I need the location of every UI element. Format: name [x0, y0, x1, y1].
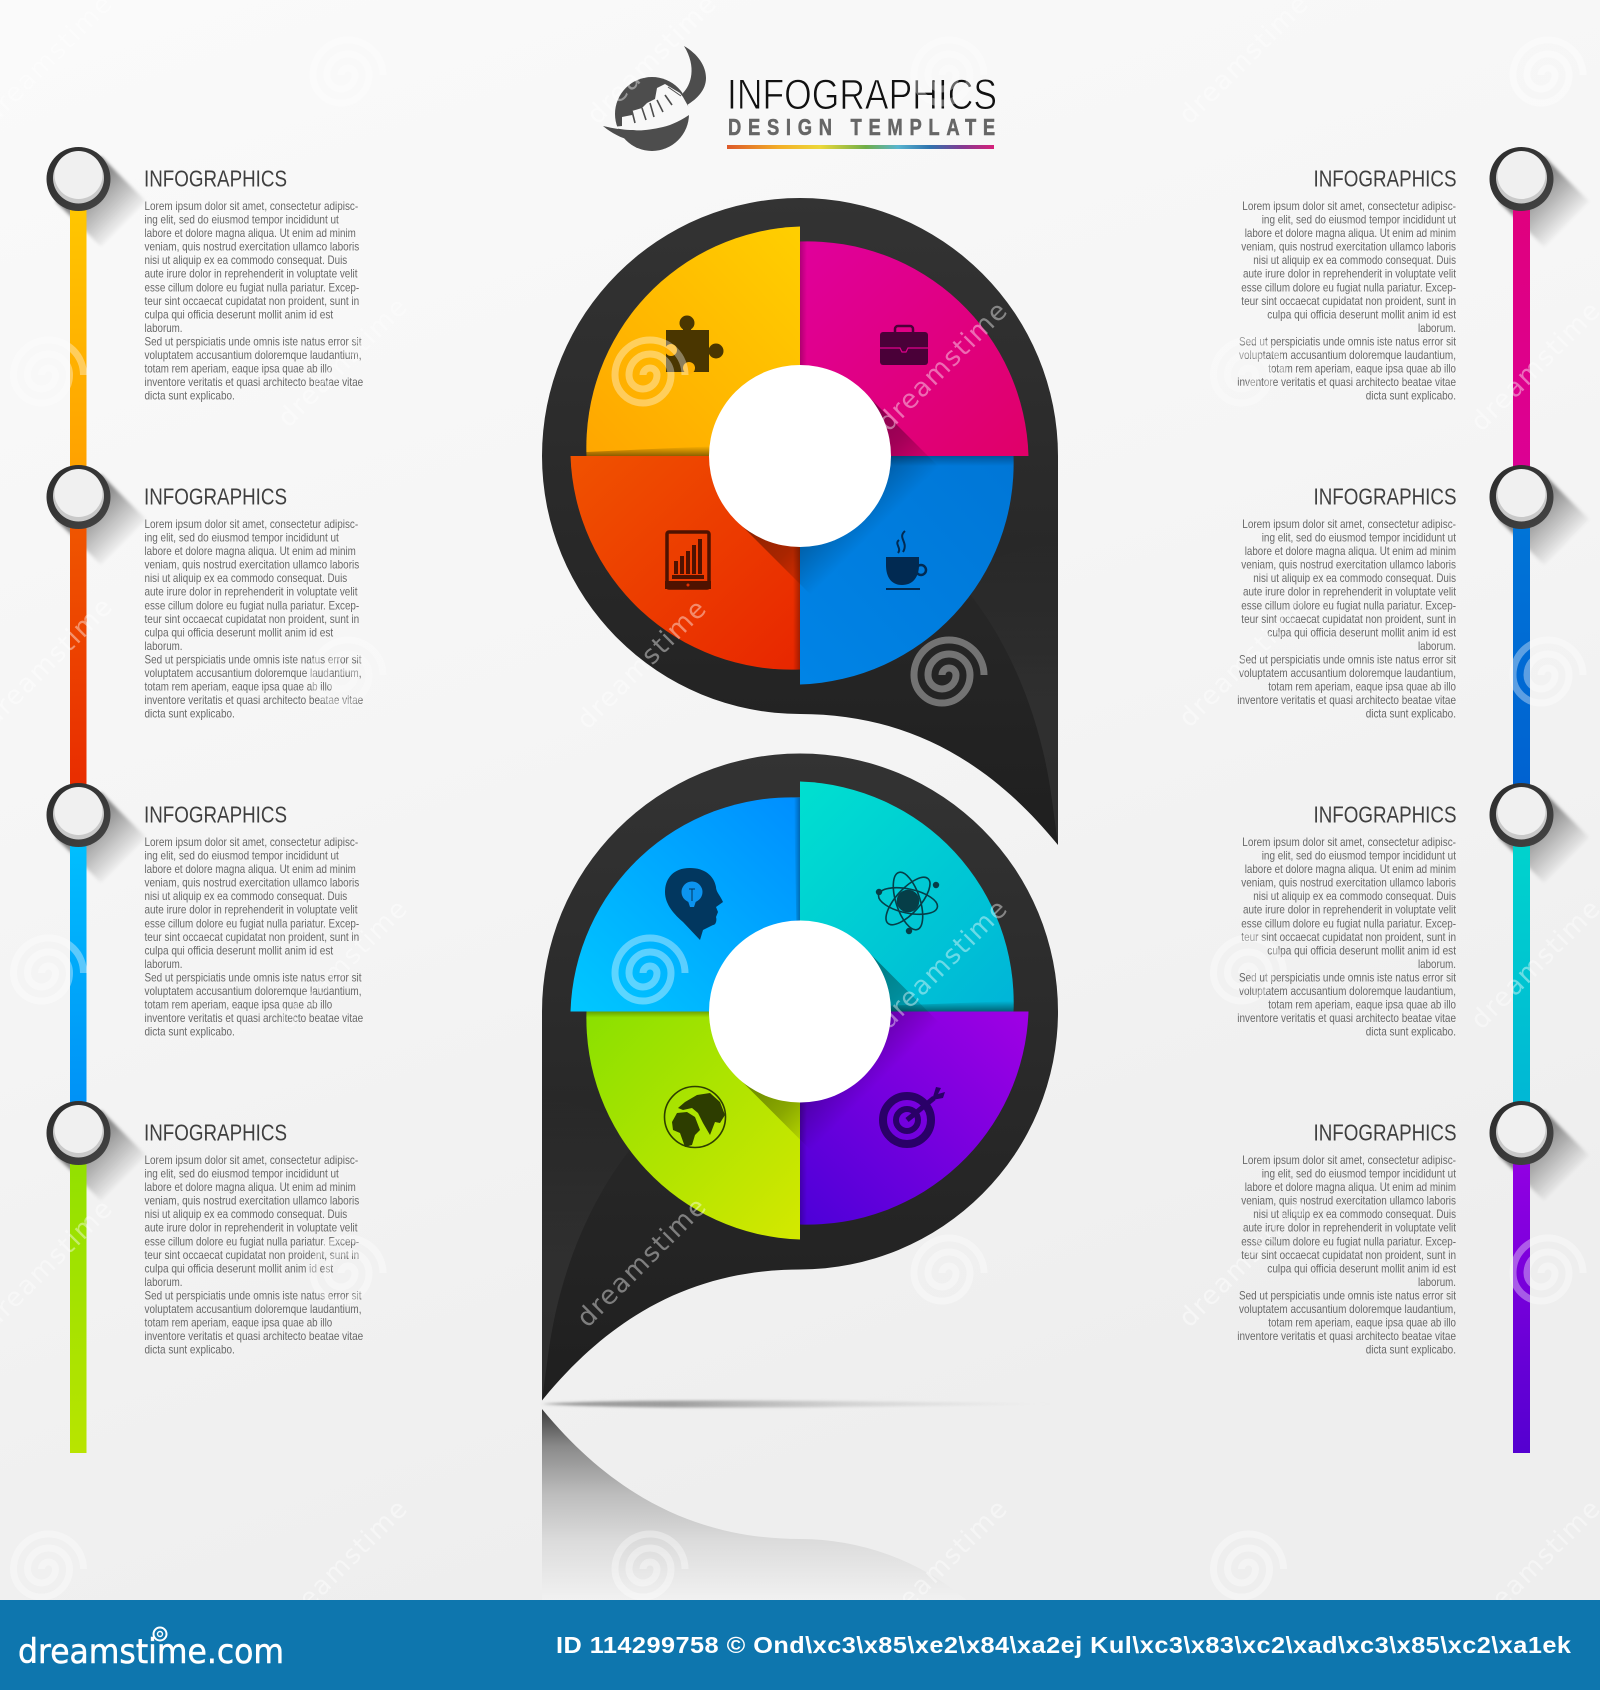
watermark text: dreamstime: [872, 295, 1014, 437]
text block: right 2: Lorem ipsum dolor sit amet, consectetur adipisc-: [1242, 517, 1456, 531]
text block: right 2: INFOGRAPHICS: [1314, 484, 1456, 510]
text block: left 2: laborum.: [144, 639, 182, 653]
text block: right 3: esse cillum dolore eu fugiat nulla pariatur. Excep-: [1241, 916, 1456, 930]
text block: left 1: nisi ut aliquip ex ea commodo consequat. Duis: [144, 253, 347, 267]
text block: left 1: INFOGRAPHICS: [144, 166, 287, 192]
text block: left 4: aute irure dolor in reprehenderit in voluptate velit: [144, 1221, 358, 1235]
bar: teal: [1513, 815, 1530, 1133]
watermark text: dreamstime: [571, 593, 713, 735]
bar: green: [70, 1133, 86, 1453]
footer credit: ID 114299758 © Ond\xc3\x85\xe2\x84\xa2ej Kul\xc3\x83\xc2\xad\xc3\x85\xc2\xa1ek: [556, 1633, 1572, 1659]
text block: right 4: INFOGRAPHICS: [1314, 1120, 1456, 1146]
icon: logo emblem: [603, 46, 706, 151]
text block: right 2: aute irure dolor in reprehenderit in voluptate velit: [1243, 585, 1457, 599]
text block: left 4: totam rem aperiam, eaque ipsa quae ab illo: [144, 1316, 332, 1330]
text block: left 3: teur sint occaecat cupidatat non proident, sunt in: [144, 930, 359, 944]
text block: right 1: inventore veritatis et quasi architecto beatae vitae: [1237, 375, 1456, 389]
text block: right 4: voluptatem accusantium doloremque laudantium,: [1239, 1302, 1456, 1316]
text block: left 3: [144, 802, 363, 1039]
text block: right 2: [1237, 484, 1457, 721]
text block: left 4: [144, 1120, 363, 1357]
node 4: [1490, 1101, 1554, 1165]
text block: right 1: aute irure dolor in reprehenderit in voluptate velit: [1243, 267, 1457, 281]
text block: left 2: voluptatem accusantium doloremque laudantium,: [144, 666, 362, 680]
text block: left 3: Sed ut perspiciatis unde omnis iste natus error sit: [144, 970, 362, 984]
text block: right 4: laborum.: [1418, 1275, 1456, 1289]
segment: magenta: [800, 241, 1028, 456]
segment: sky blue: [570, 797, 800, 1012]
text block: left 1: aute irure dolor in reprehenderit in voluptate velit: [144, 267, 358, 281]
text block: left 2: teur sint occaecat cupidatat non proident, sunt in: [144, 612, 359, 626]
ground shadow: [542, 1400, 1060, 1408]
text block: right 4: nisi ut aliquip ex ea commodo consequat. Duis: [1253, 1207, 1456, 1221]
text block: right 4: teur sint occaecat cupidatat non proident, sunt in: [1241, 1248, 1456, 1262]
text block: right 3: aute irure dolor in reprehenderit in voluptate velit: [1243, 903, 1457, 917]
text block: right 4: labore et dolore magna aliqua. Ut enim ad minim: [1245, 1180, 1456, 1194]
text block: left 1: Lorem ipsum dolor sit amet, consectetur adipisc-: [144, 199, 358, 213]
node 1: [46, 147, 110, 211]
center disc: [709, 365, 891, 547]
text block: left 3: Lorem ipsum dolor sit amet, consectetur adipisc-: [144, 835, 358, 849]
text block: right 2: culpa qui officia deserunt mollit anim id est: [1267, 625, 1457, 639]
bottom wheel: [570, 782, 1028, 1240]
text block: left 3: totam rem aperiam, eaque ipsa quae ab illo: [144, 998, 332, 1012]
text block: left 2: [144, 484, 363, 721]
text block: right 4: dicta sunt explicabo.: [1366, 1343, 1456, 1357]
segment: purple: [800, 1012, 1028, 1225]
text block: left 1: culpa qui officia deserunt mollit anim id est: [144, 307, 334, 321]
segment shadows: [586, 240, 1030, 686]
text block: left 3: voluptatem accusantium doloremque laudantium,: [144, 984, 362, 998]
right timeline: [1490, 147, 1589, 1453]
text block: left 3: esse cillum dolore eu fugiat nulla pariatur. Excep-: [144, 916, 359, 930]
text block: left 2: inventore veritatis et quasi architecto beatae vitae: [144, 693, 363, 707]
rainbow underline: [727, 145, 994, 149]
text block: right 3: labore et dolore magna aliqua. Ut enim ad minim: [1245, 862, 1456, 876]
text block: right 2: voluptatem accusantium doloremque laudantium,: [1239, 666, 1456, 680]
text block: left 3: laborum.: [144, 957, 182, 971]
bottom pin: dark speech-drop shape: [542, 754, 1058, 1400]
text block: right 1: culpa qui officia deserunt mollit anim id est: [1267, 307, 1457, 321]
text block: left 4: laborum.: [144, 1275, 182, 1289]
subheading: DESIGN TEMPLATE: DESIGN TEMPLATE: [728, 115, 995, 141]
text block: right 4: aute irure dolor in reprehenderit in voluptate velit: [1243, 1221, 1457, 1235]
text block: left 4: ing elit, sed do eiusmod tempor incididunt ut: [144, 1166, 339, 1180]
text block: right 2: totam rem aperiam, eaque ipsa quae ab illo: [1268, 680, 1456, 694]
segment: yellow: [586, 226, 800, 456]
text block: left 1: [144, 166, 363, 403]
text block: left 1: veniam, quis nostrud exercitation ullamco laboris: [144, 240, 359, 254]
text block: left 2: aute irure dolor in reprehenderit in voluptate velit: [144, 585, 358, 599]
text block: right 3: laborum.: [1418, 957, 1456, 971]
footer logo: dreamstime.com: dreamstime.com: [18, 1632, 284, 1672]
text block: right 1: Sed ut perspiciatis unde omnis iste natus error sit: [1239, 334, 1457, 348]
text block: right 3: Lorem ipsum dolor sit amet, consectetur adipisc-: [1242, 835, 1456, 849]
reflection of bottom pin: [542, 1409, 967, 1600]
text block: right 1: esse cillum dolore eu fugiat nulla pariatur. Excep-: [1241, 280, 1456, 294]
text block: right 2: labore et dolore magna aliqua. Ut enim ad minim: [1245, 544, 1456, 558]
footer band: [0, 1600, 1600, 1690]
icon: atom: [876, 869, 940, 933]
node 3: [46, 783, 110, 847]
text block: left 2: esse cillum dolore eu fugiat nulla pariatur. Excep-: [144, 598, 359, 612]
text block: left 2: dicta sunt explicabo.: [144, 707, 235, 721]
icon: puzzle piece: [665, 316, 724, 374]
text block: left 4: veniam, quis nostrud exercitation ullamco laboris: [144, 1194, 359, 1208]
text block: left 4: inventore veritatis et quasi architecto beatae vitae: [144, 1329, 363, 1343]
text block: left 2: culpa qui officia deserunt mollit anim id est: [144, 625, 334, 639]
node 1: [1490, 147, 1554, 211]
text block: right 2: ing elit, sed do eiusmod tempor incididunt ut: [1262, 530, 1457, 544]
text block: right 4: veniam, quis nostrud exercitation ullamco laboris: [1241, 1194, 1456, 1208]
icon: briefcase: [880, 326, 928, 365]
text block: right 1: nisi ut aliquip ex ea commodo consequat. Duis: [1253, 253, 1456, 267]
text block: left 1: teur sint occaecat cupidatat non proident, sunt in: [144, 294, 359, 308]
text block: right 1: veniam, quis nostrud exercitation ullamco laboris: [1241, 240, 1456, 254]
text block: left 3: inventore veritatis et quasi architecto beatae vitae: [144, 1011, 363, 1025]
text block: right 1: ing elit, sed do eiusmod tempor incididunt ut: [1262, 212, 1457, 226]
text block: right 2: laborum.: [1418, 639, 1456, 653]
text block: left 4: dicta sunt explicabo.: [144, 1343, 235, 1357]
top pin: dark speech-drop shape: [542, 198, 1058, 845]
text block: left 4: nisi ut aliquip ex ea commodo consequat. Duis: [144, 1207, 347, 1221]
segment: lime: [586, 1012, 800, 1240]
text block: right 1: Lorem ipsum dolor sit amet, consectetur adipisc-: [1242, 199, 1456, 213]
watermark text: dreamstime: [272, 893, 414, 1035]
text block: left 1: laborum.: [144, 321, 182, 335]
watermark text: dreamstime: [872, 1493, 1014, 1635]
text block: right 1: dicta sunt explicabo.: [1366, 389, 1456, 403]
text block: left 2: nisi ut aliquip ex ea commodo consequat. Duis: [144, 571, 347, 585]
segment: red: [570, 456, 800, 670]
node 2: [1490, 465, 1554, 529]
text block: right 4: ing elit, sed do eiusmod tempor incididunt ut: [1262, 1166, 1457, 1180]
text block: right 3: ing elit, sed do eiusmod tempor incididunt ut: [1262, 848, 1457, 862]
text block: right 4: inventore veritatis et quasi architecto beatae vitae: [1237, 1329, 1456, 1343]
text block: left 2: totam rem aperiam, eaque ipsa quae ab illo: [144, 680, 332, 694]
text block: right 3: Sed ut perspiciatis unde omnis iste natus error sit: [1239, 970, 1457, 984]
text block: right 1: INFOGRAPHICS: [1314, 166, 1456, 192]
watermark text: dreamstime: [272, 291, 414, 433]
text block: left 2: ing elit, sed do eiusmod tempor incididunt ut: [144, 530, 339, 544]
text block: left 4: culpa qui officia deserunt mollit anim id est: [144, 1261, 334, 1275]
text block: right 4: esse cillum dolore eu fugiat nulla pariatur. Excep-: [1241, 1234, 1456, 1248]
bar: yellow: [70, 179, 86, 497]
text block: right 2: veniam, quis nostrud exercitation ullamco laboris: [1241, 558, 1456, 572]
text block: left 3: dicta sunt explicabo.: [144, 1025, 235, 1039]
text block: right 3: culpa qui officia deserunt mollit anim id est: [1267, 943, 1457, 957]
text block: left 1: ing elit, sed do eiusmod tempor incididunt ut: [144, 212, 339, 226]
text block: left 2: Lorem ipsum dolor sit amet, consectetur adipisc-: [144, 517, 358, 531]
bar: magenta: [1513, 179, 1530, 497]
text block: left 3: INFOGRAPHICS: [144, 802, 287, 828]
segment: teal: [800, 782, 1014, 1012]
segment: blue: [800, 456, 1014, 684]
watermark text: dreamstime: [1173, 1191, 1315, 1333]
text block: left 3: nisi ut aliquip ex ea commodo consequat. Duis: [144, 889, 347, 903]
long shadows: [56, 156, 146, 1201]
text block: left 4: Sed ut perspiciatis unde omnis iste natus error sit: [144, 1288, 362, 1302]
watermark text: dreamstime: [1173, 591, 1315, 733]
text block: left 1: inventore veritatis et quasi architecto beatae vitae: [144, 375, 363, 389]
text block: right 3: nisi ut aliquip ex ea commodo consequat. Duis: [1253, 889, 1456, 903]
text block: right 2: inventore veritatis et quasi architecto beatae vitae: [1237, 693, 1456, 707]
text block: right 2: dicta sunt explicabo.: [1366, 707, 1456, 721]
text block: left 2: INFOGRAPHICS: [144, 484, 287, 510]
text block: right 3: veniam, quis nostrud exercitation ullamco laboris: [1241, 876, 1456, 890]
text block: left 3: culpa qui officia deserunt mollit anim id est: [144, 943, 334, 957]
node 3: [1490, 783, 1554, 847]
top wheel: [570, 226, 1030, 686]
text block: left 3: ing elit, sed do eiusmod tempor incididunt ut: [144, 848, 339, 862]
logo and title: [603, 46, 997, 151]
text block: left 3: aute irure dolor in reprehenderit in voluptate velit: [144, 903, 358, 917]
icon: head with lightbulb: [665, 868, 723, 940]
node 2: [46, 465, 110, 529]
text block: left 4: teur sint occaecat cupidatat non proident, sunt in: [144, 1248, 359, 1262]
bar: blue: [70, 815, 86, 1133]
text block: left 1: totam rem aperiam, eaque ipsa quae ab illo: [144, 362, 332, 376]
text block: left 4: voluptatem accusantium doloremque laudantium,: [144, 1302, 362, 1316]
icon: tablet chart: [665, 532, 711, 589]
text block: right 2: teur sint occaecat cupidatat non proident, sunt in: [1241, 612, 1456, 626]
text block: right 4: culpa qui officia deserunt mollit anim id est: [1267, 1261, 1457, 1275]
text block: right 4: totam rem aperiam, eaque ipsa quae ab illo: [1268, 1316, 1456, 1330]
text block: right 3: totam rem aperiam, eaque ipsa quae ab illo: [1268, 998, 1456, 1012]
long shadows: [1499, 156, 1589, 1201]
text block: right 3: inventore veritatis et quasi architecto beatae vitae: [1237, 1011, 1456, 1025]
watermark text: dreamstime: [571, 1191, 713, 1333]
text block: left 1: voluptatem accusantium doloremque laudantium,: [144, 348, 362, 362]
text block: right 1: labore et dolore magna aliqua. Ut enim ad minim: [1245, 226, 1456, 240]
text block: left 2: veniam, quis nostrud exercitation ullamco laboris: [144, 558, 359, 572]
text block: right 2: esse cillum dolore eu fugiat nulla pariatur. Excep-: [1241, 598, 1456, 612]
text block: right 2: Sed ut perspiciatis unde omnis iste natus error sit: [1239, 652, 1457, 666]
text block: left 1: dicta sunt explicabo.: [144, 389, 235, 403]
text block: right 4: Sed ut perspiciatis unde omnis iste natus error sit: [1239, 1288, 1457, 1302]
text block: left 4: Lorem ipsum dolor sit amet, consectetur adipisc-: [144, 1153, 358, 1167]
text block: right 1: totam rem aperiam, eaque ipsa quae ab illo: [1268, 362, 1456, 376]
text block: right 4: Lorem ipsum dolor sit amet, consectetur adipisc-: [1242, 1153, 1456, 1167]
segment shadows: [570, 798, 1014, 1226]
text block: right 3: voluptatem accusantium doloremque laudantium,: [1239, 984, 1456, 998]
icon: globe: [664, 1086, 726, 1148]
text block: right 3: INFOGRAPHICS: [1314, 802, 1456, 828]
text block: right 1: [1237, 166, 1457, 403]
text block: right 1: voluptatem accusantium doloremque laudantium,: [1239, 348, 1456, 362]
text block: left 4: esse cillum dolore eu fugiat nulla pariatur. Excep-: [144, 1234, 359, 1248]
text block: right 3: dicta sunt explicabo.: [1366, 1025, 1456, 1039]
watermark text: dreamstime: [272, 1493, 414, 1635]
text block: right 2: nisi ut aliquip ex ea commodo consequat. Duis: [1253, 571, 1456, 585]
heading: INFOGRAPHICS: INFOGRAPHICS: [727, 71, 997, 119]
text block: left 2: labore et dolore magna aliqua. Ut enim ad minim: [144, 544, 356, 558]
text block: left 1: labore et dolore magna aliqua. Ut enim ad minim: [144, 226, 356, 240]
text block: right 3: [1237, 802, 1457, 1039]
text block: left 4: INFOGRAPHICS: [144, 1120, 287, 1146]
text block: left 1: Sed ut perspiciatis unde omnis iste natus error sit: [144, 334, 362, 348]
text block: right 1: laborum.: [1418, 321, 1456, 335]
text block: right 1: teur sint occaecat cupidatat non proident, sunt in: [1241, 294, 1456, 308]
bar: orange: [70, 497, 86, 815]
text block: left 3: labore et dolore magna aliqua. Ut enim ad minim: [144, 862, 356, 876]
text block: left 3: veniam, quis nostrud exercitation ullamco laboris: [144, 876, 359, 890]
text block: left 2: Sed ut perspiciatis unde omnis iste natus error sit: [144, 652, 362, 666]
text block: right 3: teur sint occaecat cupidatat non proident, sunt in: [1241, 930, 1456, 944]
text block: left 1: esse cillum dolore eu fugiat nulla pariatur. Excep-: [144, 280, 359, 294]
text block: right 4: [1237, 1120, 1457, 1357]
icon: target with arrow: [883, 1087, 945, 1144]
left timeline: [46, 147, 146, 1453]
text block: left 4: labore et dolore magna aliqua. Ut enim ad minim: [144, 1180, 356, 1194]
icon: coffee cup: [886, 531, 926, 590]
center disc: [709, 920, 891, 1102]
watermark text: dreamstime: [872, 893, 1014, 1035]
bar: purple: [1513, 1133, 1530, 1453]
bar: blue: [1513, 497, 1530, 815]
node 4: [46, 1101, 110, 1165]
